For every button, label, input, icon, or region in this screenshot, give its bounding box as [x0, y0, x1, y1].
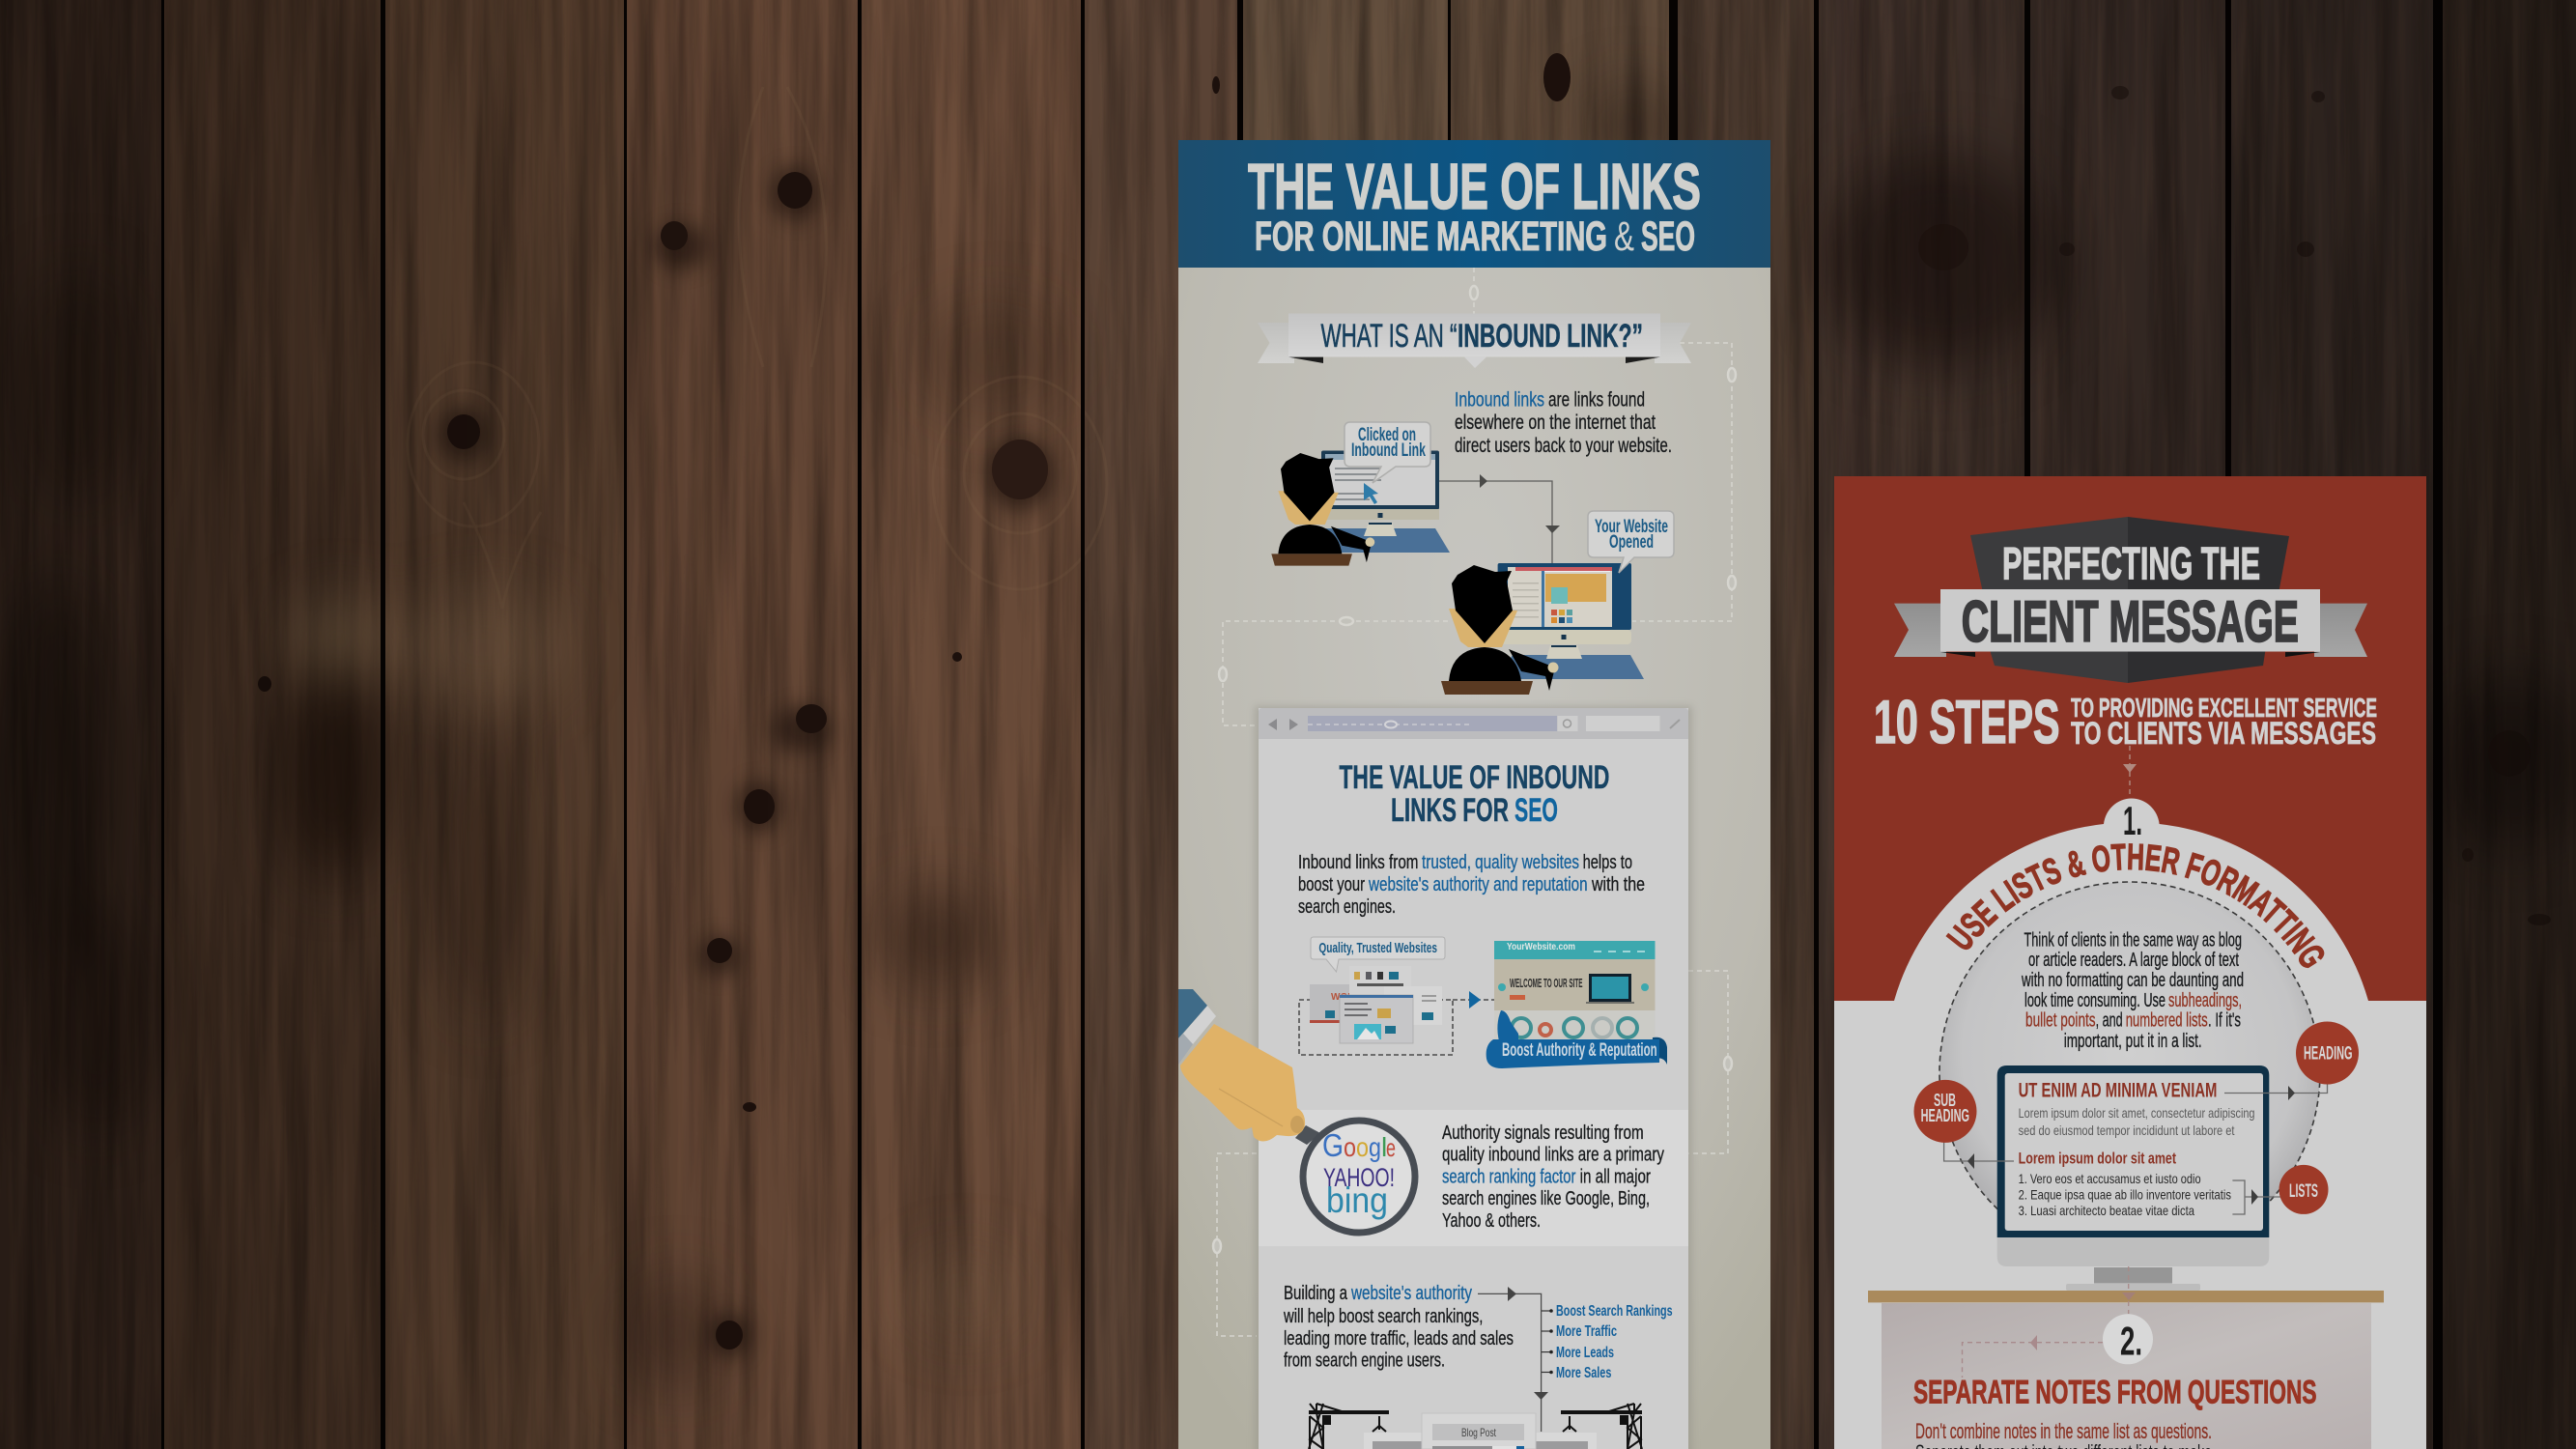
title ribbon — [1894, 589, 2367, 657]
illustration: your website screenshot — [1494, 941, 1656, 1041]
badge: lists — [2279, 1165, 2328, 1214]
step one paragraph: subheadings, — [2168, 990, 2242, 1011]
title: SEO — [1641, 213, 1695, 260]
benefits list: More Traffic — [1556, 1323, 1617, 1340]
monitor document text: sed do eiusmod tempor incididunt ut labore et — [2019, 1122, 2235, 1138]
step one paragraph: Think of clients in the same way as blog — [2024, 930, 2242, 952]
inbound links definition text: direct users back to your website. — [1455, 435, 1672, 457]
paragraph: trusted quality websites: boost your — [1298, 874, 1365, 895]
search engine logos: g — [1369, 1132, 1381, 1162]
monitor document text: Lorem ipsum dolor sit amet, consectetur adipiscing — [2019, 1105, 2254, 1121]
illustration: right crane — [1561, 1404, 1642, 1449]
title: FOR ONLINE MARKETING — [1255, 213, 1607, 260]
inbound links definition text — [1455, 389, 1672, 457]
illustration: your website screenshot: WELCOME TO OUR SITE — [1510, 976, 1583, 990]
panel: perfecting the client message infographic — [1834, 476, 2426, 1449]
ribbon heading — [1258, 313, 1691, 368]
benefits list: More Leads — [1556, 1345, 1614, 1361]
panel: the value of links infographic — [1178, 140, 1770, 1449]
step one paragraph — [2021, 930, 2244, 1052]
connector: lists — [2232, 1180, 2284, 1214]
step number two: 2. — [2120, 1318, 2142, 1364]
monitor document text: UT ENIM AD MINIMA VENIAM — [2019, 1080, 2217, 1102]
browser toolbar — [1259, 708, 1688, 739]
shield badge — [1970, 517, 2289, 683]
step one paragraph: with no formatting can be daunting and — [2021, 970, 2244, 991]
title: & — [1614, 213, 1634, 260]
search engine logos: YAHOO! — [1323, 1163, 1395, 1192]
curved heading: use lists and other formatting: USE LISTS & OTHER FORMATTING — [1945, 843, 2324, 968]
panel background — [1178, 140, 1770, 1449]
illustration: website thumbnails: WORLD — [1331, 992, 1368, 1003]
search engine logos: bing — [1326, 1180, 1388, 1220]
text: building authority — [1283, 1283, 1514, 1372]
header band — [1178, 140, 1770, 268]
search engine logos: e — [1386, 1133, 1396, 1162]
illustration: second monitor with website — [1497, 563, 1644, 679]
callout: clicked on inbound link — [1345, 422, 1430, 483]
text: authority signals — [1442, 1122, 1664, 1232]
panel: browser window — [1255, 706, 1692, 1449]
thumbs up ribbon: boost authority and reputation: Boost Authority & Reputation — [1502, 1040, 1657, 1061]
connector to benefits — [1478, 1287, 1553, 1432]
illustration: first person at desk — [1271, 453, 1374, 566]
connector: sub heading — [1944, 1140, 2014, 1169]
callout: your website opened: Opened — [1609, 532, 1654, 553]
search engine logos: G — [1322, 1127, 1344, 1163]
monitor document text — [2019, 1080, 2254, 1218]
illustration: your website screenshot: YourWebsite.com — [1507, 942, 1575, 952]
heading: separate notes from questions: SEPARATE NOTES FROM QUESTIONS — [1913, 1375, 2316, 1411]
illustration: hand holding magnifier — [1178, 989, 1415, 1233]
search engine logos: o — [1356, 1132, 1369, 1162]
badge: sub heading: SUB — [1934, 1091, 1956, 1110]
inbound links definition text: Inbound links — [1455, 389, 1544, 412]
step two paragraph — [1915, 1419, 2212, 1449]
illustration: website thumbnails — [1299, 966, 1453, 1055]
connector: heading — [2224, 1082, 2328, 1100]
title ribbon: CLIENT MESSAGE — [1962, 589, 2299, 654]
subtitle: 10 steps — [1874, 689, 2377, 756]
callout: your website opened — [1588, 511, 1674, 573]
paragraph: trusted quality websites: website's authority and reputation — [1368, 874, 1588, 895]
inbound links definition text: elsewhere on the internet that — [1455, 412, 1656, 434]
illustration: first monitor — [1294, 450, 1450, 553]
text: building authority: website's authority — [1350, 1283, 1472, 1304]
badge: lists: LISTS — [2289, 1181, 2318, 1202]
step number one: 1. — [2123, 798, 2142, 843]
text: building authority: leading more traffic, leads and sales — [1284, 1328, 1514, 1350]
badge: heading: HEADING — [2304, 1044, 2353, 1065]
search engine logos: l — [1381, 1132, 1387, 1162]
paragraph: trusted quality websites — [1298, 852, 1645, 918]
text: authority signals: search ranking factor — [1442, 1167, 1576, 1188]
monitor document text: Lorem ipsum dolor sit amet — [2019, 1150, 2176, 1167]
dashed connector to step two — [1963, 1266, 2136, 1378]
benefits list: Boost Search Rankings — [1556, 1303, 1673, 1320]
text: authority signals: Yahoo & others. — [1442, 1210, 1541, 1232]
thumbs up ribbon: boost authority and reputation — [1486, 1010, 1667, 1068]
text: building authority: from search engine users. — [1284, 1350, 1445, 1372]
benefits list — [1556, 1303, 1673, 1381]
subtitle: 10 steps: TO PROVIDING EXCELLENT SERVICE — [2071, 693, 2377, 723]
paragraph: trusted quality websites: Inbound links from — [1298, 852, 1418, 873]
dashed arrow to step one — [2123, 746, 2137, 794]
benefits list: More Sales — [1556, 1365, 1611, 1381]
red upper section — [1834, 476, 2426, 1001]
text: authority signals: search engines like Google, Bing, — [1442, 1188, 1650, 1209]
ribbon heading: INBOUND LINK?” — [1458, 318, 1643, 355]
badge: heading — [2296, 1022, 2359, 1084]
monitor — [1997, 1065, 2269, 1291]
illustration: second person at desk — [1441, 565, 1559, 695]
title — [1248, 151, 1701, 260]
title line one: PERFECTING THE — [2002, 537, 2260, 588]
panel background — [1834, 476, 2426, 1449]
callout: quality trusted websites: Quality, Trusted Websites — [1318, 940, 1437, 956]
paragraph: trusted quality websites: with the — [1591, 874, 1645, 895]
heading: value of inbound links: THE VALUE OF INBOUND — [1339, 759, 1609, 796]
callout: your website opened: Your Website — [1595, 517, 1668, 537]
text: building authority: Building a — [1284, 1283, 1348, 1304]
flow arrows between monitors — [1435, 474, 1560, 563]
search engine logos — [1322, 1127, 1396, 1220]
text: authority signals: in all major — [1580, 1167, 1651, 1188]
dashed inner circle — [1939, 882, 2320, 1263]
heading: value of inbound links: LINKS FOR — [1391, 792, 1509, 829]
blog post cards — [1364, 1413, 1597, 1449]
monitor document text: 1. Vero eos et accusamus et iusto odio — [2019, 1171, 2201, 1186]
step one paragraph: look time consuming. Use — [2024, 990, 2166, 1011]
badge: sub heading: HEADING — [1921, 1106, 1969, 1125]
step two paragraph: Don't combine notes in the same list as questions. — [1915, 1419, 2212, 1443]
heading: value of inbound links: SEO — [1514, 792, 1558, 829]
step one paragraph: bullet points — [2025, 1010, 2096, 1032]
monitor document text: 2. Eaque ipsa quae ab illo inventore veritatis — [2019, 1187, 2231, 1203]
step one paragraph: numbered lists — [2126, 1010, 2208, 1032]
search engine logos: o — [1344, 1132, 1356, 1162]
dashed link connectors — [1213, 268, 1736, 1336]
table top — [1868, 1291, 2384, 1302]
blog post cards: Blog Post — [1461, 1426, 1496, 1439]
paragraph: trusted quality websites: search engines. — [1298, 896, 1396, 918]
callout: clicked on inbound link: Clicked on — [1358, 425, 1416, 445]
badge: sub heading — [1914, 1080, 1976, 1143]
step one paragraph: , and — [2096, 1010, 2123, 1032]
text: authority signals: quality inbound links are a primary — [1442, 1145, 1664, 1166]
band: authority signals — [1259, 1110, 1688, 1246]
callout: quality trusted websites — [1311, 937, 1445, 972]
illustration: left crane — [1309, 1404, 1389, 1449]
step one paragraph: . If it's — [2208, 1010, 2241, 1032]
table front — [1882, 1303, 2371, 1449]
white dome with step tab — [1894, 799, 2368, 1082]
paragraph: trusted quality websites: helps to — [1583, 852, 1632, 873]
inbound links definition text: are links found — [1548, 389, 1645, 412]
callout: clicked on inbound link: Inbound Link — [1351, 440, 1426, 461]
step number two — [2103, 1314, 2153, 1364]
step one paragraph: important, put it in a list. — [2064, 1031, 2202, 1052]
text: authority signals: Authority signals resulting from — [1442, 1122, 1644, 1144]
title: THE VALUE OF LINKS — [1248, 151, 1701, 223]
subtitle: 10 steps: 10 STEPS — [1874, 689, 2059, 756]
subtitle: 10 steps: TO CLIENTS VIA MESSAGES — [2071, 716, 2376, 751]
ribbon heading: WHAT IS AN “ — [1321, 318, 1457, 355]
paragraph: trusted quality websites: trusted, quality websites — [1422, 852, 1579, 873]
heading: value of inbound links — [1339, 759, 1609, 829]
text: building authority: will help boost search rankings, — [1283, 1306, 1483, 1327]
monitor document text: 3. Luasi architecto beatae vitae dicta — [2019, 1203, 2194, 1218]
dashed arrow to your website — [1453, 991, 1494, 1009]
step one paragraph: or article readers. A large block of text — [2028, 950, 2239, 971]
